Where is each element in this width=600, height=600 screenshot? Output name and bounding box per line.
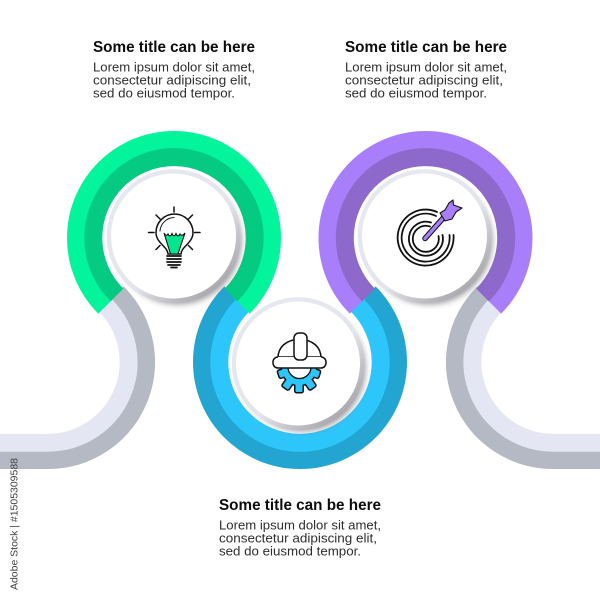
text block: top right <box>345 39 507 100</box>
text block: top left: sed do eiusmod tempor. <box>93 86 235 100</box>
text block: bottom: Some title can be here <box>219 497 381 514</box>
white circle: helmet <box>234 300 365 431</box>
text block: top right: Lorem ipsum dolor sit amet, <box>345 60 507 74</box>
right grey connector path <box>455 293 600 460</box>
icon: light bulb <box>148 207 200 268</box>
text block: bottom: Lorem ipsum dolor sit amet, <box>219 518 381 532</box>
green ring segment <box>76 140 272 307</box>
text block: top right: Some title can be here <box>345 39 507 56</box>
text block: top left <box>93 39 255 100</box>
purple ring segment <box>327 140 523 307</box>
icon: helmet with gear <box>273 333 326 392</box>
white circle: target <box>360 172 492 304</box>
text block: top right: sed do eiusmod tempor. <box>345 86 487 100</box>
vertical file number: Adobe Stock | #1505309588 <box>8 458 20 590</box>
text block: top left: Lorem ipsum dolor sit amet, <box>93 60 255 74</box>
text block: bottom: consectetur adipiscing elit, <box>219 532 377 546</box>
text block: bottom: sed do eiusmod tempor. <box>219 544 361 558</box>
icon: target with arrow <box>398 200 462 266</box>
white circle: bulb <box>109 172 241 304</box>
text block: top left: consectetur adipiscing elit, <box>93 74 251 88</box>
left grey connector path <box>0 293 146 460</box>
text block: bottom <box>219 497 381 558</box>
blue ring segment <box>202 293 398 460</box>
text block: top left: Some title can be here <box>93 39 255 56</box>
text block: top right: consectetur adipiscing elit, <box>345 74 503 88</box>
